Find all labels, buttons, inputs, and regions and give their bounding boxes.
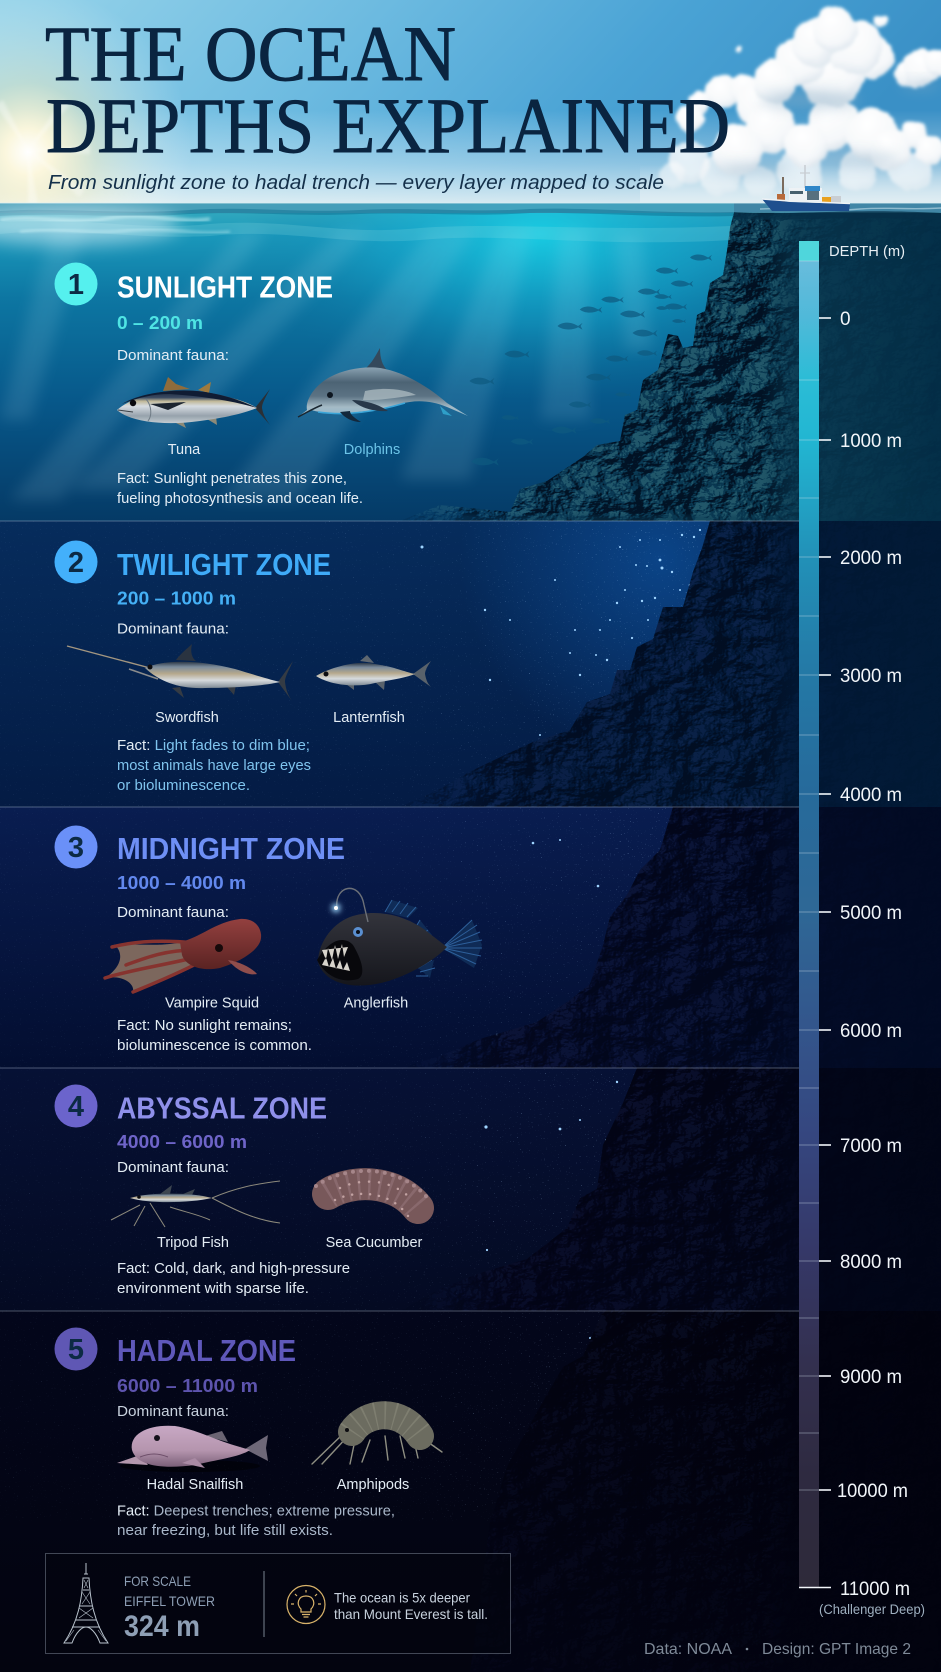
fact: Fact: Light fades to dim blue; [117,738,310,754]
fact [117,471,363,507]
fact [117,1261,350,1297]
zone number badge [54,1084,98,1128]
depth labels: 6000 m [840,1021,902,1042]
fact: or bioluminescence. [117,778,250,794]
icon: lanternfish [316,655,431,690]
lanternfish label: Lanternfish [333,710,405,726]
icon: dolphin [298,348,468,422]
zone heading: MIDNIGHT ZONE [117,831,345,866]
depth labels: 2000 m [840,548,902,569]
footer credits: Data: NOAA [644,1641,732,1658]
panel: midnight zone [54,826,482,1054]
depth range: 4000 – 6000 m [117,1131,247,1152]
callout: scale box [46,1554,510,1654]
tripod fish label: Tripod Fish [157,1235,229,1251]
fauna label: Dominant fauna: [117,904,229,921]
depth range: 1000 – 4000 m [117,872,246,893]
depth labels: 5000 m [840,903,902,924]
icon: anglerfish [317,888,482,986]
title: THE OCEAN [45,10,456,97]
anglerfish label: Anglerfish [344,996,408,1012]
depth range: 6000 – 11000 m [117,1375,258,1396]
depth labels: 1000 m [840,431,902,452]
fauna label: Dominant fauna: [117,1403,229,1420]
zone number badge [54,826,98,868]
fact: Fact: Cold, dark, and high-pressure [117,1261,350,1277]
zone number badge [54,1328,98,1370]
fact: most animals have large eyes [117,758,311,774]
scale text: EIFFEL TOWER [124,1593,215,1609]
fauna label: Dominant fauna: [117,620,229,638]
fact [117,1504,395,1539]
depth range: 200 – 1000 m [117,588,236,608]
depth scale heading: DEPTH (m) [829,243,905,260]
hadal snailfish label: Hadal Snailfish [147,1477,243,1493]
sun rays underwater [0,215,652,500]
subtitle: From sunlight zone to hadal trench — every layer mapped to scale [48,172,664,194]
depth scale [799,241,925,1617]
depth ticks [799,318,831,1588]
fact: environment with sparse life. [117,1281,309,1297]
footer credits: Design: GPT Image 2 [762,1641,911,1658]
depth labels: 11000 m [840,1579,910,1600]
swordfish label: Swordfish [155,710,219,726]
scale text: FOR SCALE [124,1573,191,1589]
icon: hadal snailfish [117,1426,268,1472]
zone number badge: 5 [68,1334,84,1366]
zone heading: HADAL ZONE [117,1333,296,1368]
zone number badge: 2 [68,547,84,579]
icon: tripod fish [111,1181,280,1227]
vampire squid label: Vampire Squid [165,996,259,1012]
title: DEPTHS EXPLAINED [46,82,730,169]
depth labels: 4000 m [840,785,902,806]
fact: Fact: Sunlight penetrates this zone, [117,471,347,487]
sea surface waves [0,202,941,245]
zone heading: SUNLIGHT ZONE [117,270,333,304]
sky background [0,0,941,206]
footer credits [644,1641,911,1658]
dolphins label: Dolphins [344,442,400,458]
depth bar [799,241,819,1587]
depth range: 0 – 200 m [117,312,203,333]
zone number badge: 1 [68,269,84,301]
fact [117,738,311,794]
fish school [470,255,712,466]
fauna label: Dominant fauna: [117,1159,229,1176]
zone heading: TWILIGHT ZONE [117,547,331,582]
zone number badge: 3 [68,832,84,864]
fauna label: Dominant fauna: [117,347,229,364]
depth labels: 9000 m [840,1367,902,1388]
panel: twilight zone [54,540,431,794]
fact: bioluminescence is common. [117,1038,312,1054]
scale text [124,1573,215,1643]
fact: Fact: No sunlight remains; [117,1018,292,1034]
sun glow [0,0,193,317]
icon: sea cucumber [316,1171,431,1216]
comparison text [334,1590,488,1622]
title [45,10,730,169]
zone number badge [54,262,98,306]
fact: Fact: Deepest trenches; extreme pressure, [117,1504,395,1520]
icon: eiffel tower [64,1563,108,1643]
zone heading: ABYSSAL ZONE [117,1090,327,1126]
panel: hadal zone [54,1328,442,1539]
fact: fueling photosynthesis and ocean life. [117,491,363,507]
zone number badge [54,540,98,584]
zone dividers [0,521,800,1311]
depth labels: 0 [840,309,851,330]
depth labels: (Challenger Deep) [819,1602,925,1617]
panel: sunlight zone [54,262,468,507]
icon: tuna [117,377,270,428]
panel: abyssal zone [54,1084,431,1297]
depth labels: 10000 m [837,1481,908,1502]
cliff wall [380,205,941,1672]
comparison text: than Mount Everest is tall. [334,1606,488,1622]
icon: swordfish [67,644,293,701]
icon: light bulb [287,1586,325,1624]
icon: amphipods [312,1415,442,1464]
scale text: 324 m [124,1610,200,1643]
icon: vampire squid [105,919,261,992]
depth labels: 8000 m [840,1252,902,1273]
comparison text: The ocean is 5x deeper [334,1590,470,1606]
particles [0,521,720,1521]
zone number badge: 4 [68,1091,84,1123]
sea cucumber label: Sea Cucumber [326,1235,423,1251]
depth labels: 3000 m [840,666,902,687]
icon: research ship [762,165,850,211]
fact: near freezing, but life still exists. [117,1523,333,1539]
fact [117,1018,312,1054]
amphipods label: Amphipods [337,1477,409,1493]
clouds [640,7,941,206]
depth labels [819,309,925,1617]
tuna label: Tuna [168,442,201,458]
depth labels: 7000 m [840,1136,902,1157]
